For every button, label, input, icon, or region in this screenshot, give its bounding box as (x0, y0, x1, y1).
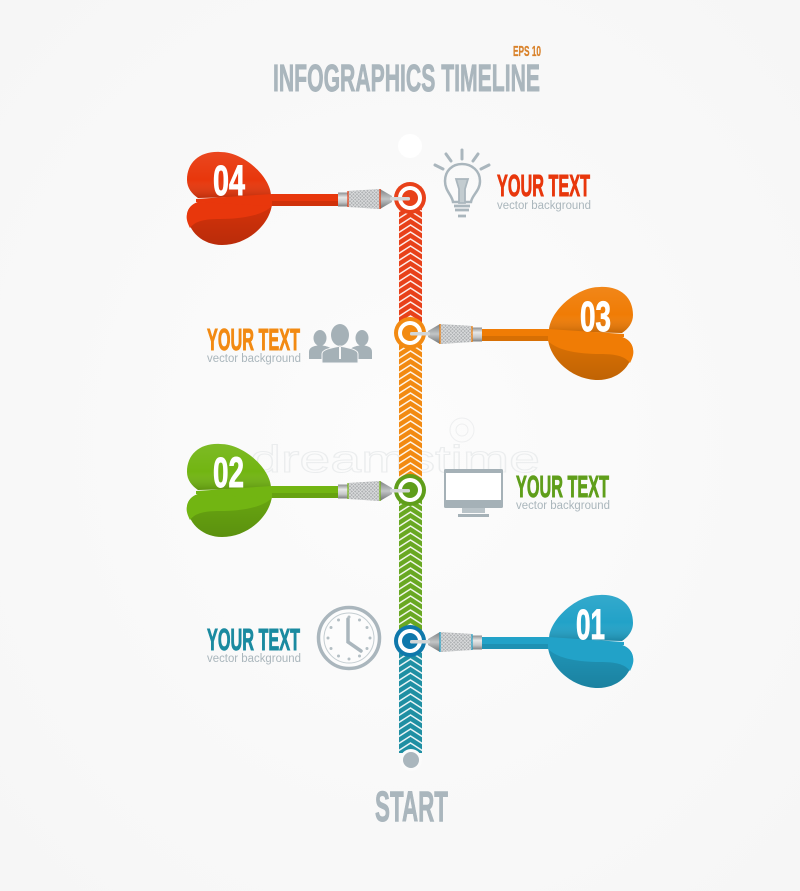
icon: light bulb (435, 150, 489, 216)
dart 03 (410, 287, 633, 380)
title: INFOGRAPHICS TIMELINE (273, 58, 540, 100)
text block 02: vector background (516, 500, 610, 512)
icon: people (309, 324, 372, 363)
text block 01: YOUR TEXT (207, 622, 300, 657)
text block 02 (516, 469, 610, 512)
text block 01: vector background (207, 653, 301, 665)
label: EPS 10: EPS 10 (513, 43, 541, 60)
start node (400, 749, 422, 771)
watermark (250, 418, 540, 481)
watermark: dreamstime (250, 439, 540, 481)
dart 04: 04 (213, 157, 245, 205)
text block 01 (207, 622, 301, 665)
text block 04: YOUR TEXT (497, 168, 590, 203)
dart 01: 01 (576, 601, 605, 649)
text block 04 (497, 168, 591, 212)
text block 03 (207, 322, 301, 365)
timeline column (399, 198, 422, 753)
dart 02: 02 (213, 449, 244, 497)
text block 03: vector background (207, 353, 301, 365)
text block 02: YOUR TEXT (516, 469, 609, 504)
text block 03: YOUR TEXT (207, 322, 300, 357)
target 03 (394, 317, 426, 349)
text block 04: vector background (497, 200, 591, 212)
heading: START: START (375, 783, 448, 831)
icon: clock (318, 608, 380, 668)
target 01 (394, 625, 426, 657)
dart 03: 03 (580, 293, 611, 341)
dart 02 (187, 444, 410, 537)
target 04 (394, 182, 426, 214)
dart 04 (187, 152, 410, 245)
dart 01 (410, 595, 633, 688)
icon: monitor (444, 469, 503, 517)
target 02 (394, 474, 426, 506)
decorative top node (398, 134, 422, 158)
